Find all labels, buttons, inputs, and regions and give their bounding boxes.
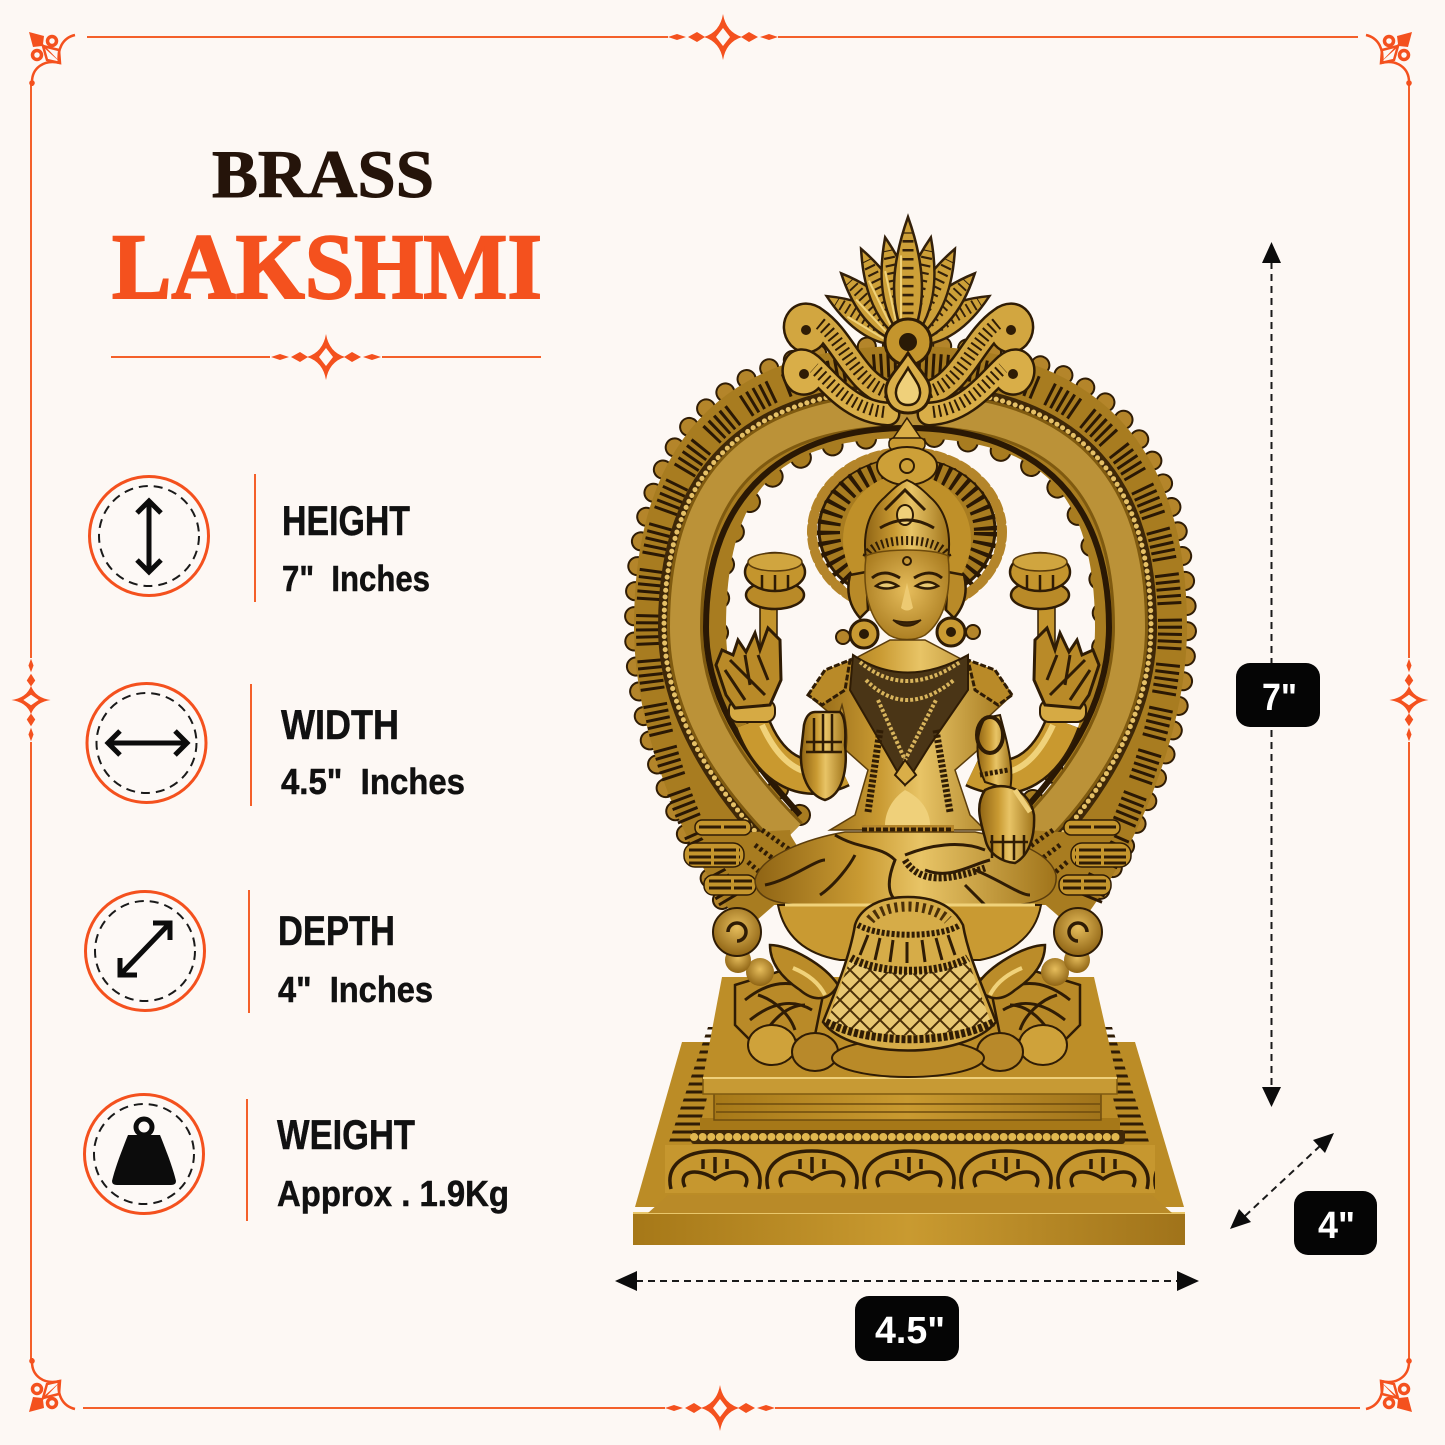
title ornament divider [111,334,541,380]
lotus seat [713,905,1102,1071]
earrings [836,618,980,648]
arch frame [634,345,1187,905]
crossed legs [755,832,1056,905]
spec: depth: 4" Inches [278,969,433,1010]
spec: weight: WEIGHT [277,1111,415,1158]
title: LAKSHMI [112,216,542,319]
head halo [812,452,1002,612]
crown [865,418,949,560]
hand resting on knee [979,786,1034,863]
upper arms holding lotuses [716,553,1099,777]
height dimension arrow [1262,242,1281,1107]
lower arm with raised hand [801,705,847,800]
icon: depth arrow [86,892,204,1010]
crest with feathers and scrolls [794,217,1023,414]
label: 4 inch depth: 4" [1318,1205,1355,1247]
icon: height arrow [90,476,208,596]
spec: depth: DEPTH [278,907,395,954]
width dimension arrow [615,1271,1199,1291]
icon: weight [84,1094,204,1214]
title [112,136,542,319]
depth dimension arrow [1230,1133,1334,1229]
spec: height: HEIGHT [282,497,410,544]
spec: width [87,684,465,806]
face [848,550,966,640]
spec: height [90,474,430,602]
title: BRASS [212,136,434,212]
spec: width: 4.5" Inches [281,761,465,802]
spec: depth [86,890,433,1013]
label: 4 inch depth [1294,1191,1377,1255]
label: 7 inch height: 7" [1262,677,1297,719]
label: 7 inch height [1236,663,1320,727]
base pedestal [633,977,1185,1245]
spec: height: 7" Inches [282,558,430,599]
label: 4.5 inch width: 4.5" [875,1310,945,1352]
hanging cloth seat drape [823,897,996,1077]
label: 4.5 inch width [855,1296,959,1361]
icon: width arrow [87,684,206,802]
lower arm with hand facing down [977,715,1011,790]
torso with necklace [808,640,1012,836]
brass Lakshmi statue [633,217,1187,1245]
spec: width: WIDTH [281,701,399,748]
spec: weight: Approx . 1.9Kg [277,1173,509,1214]
spec: weight [84,1094,509,1221]
